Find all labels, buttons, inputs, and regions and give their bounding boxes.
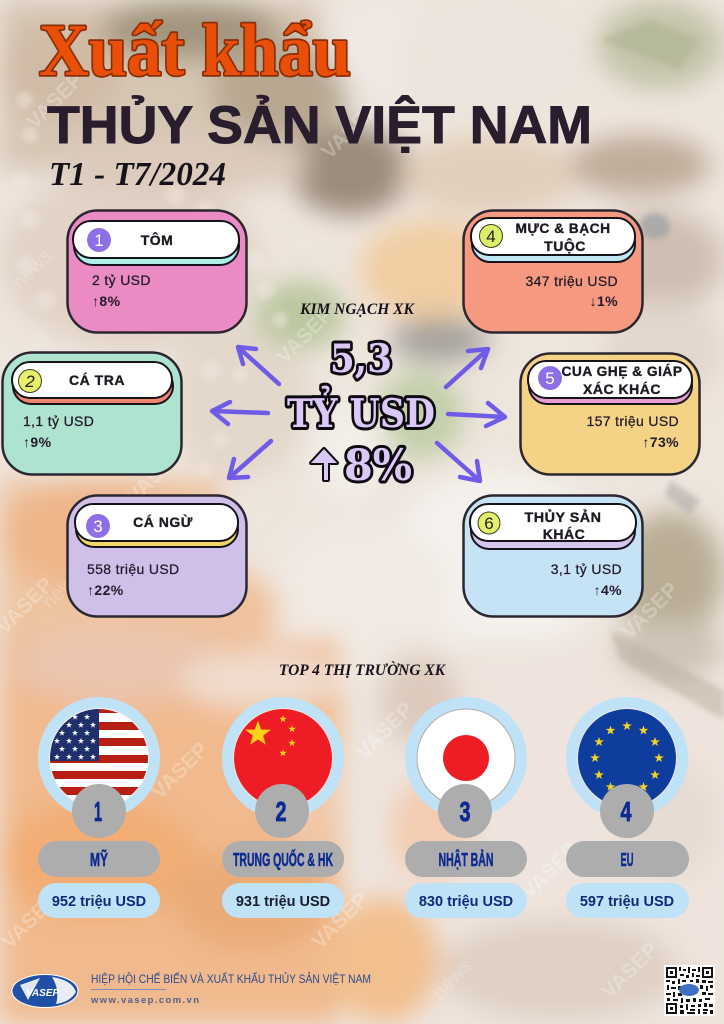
background photo collage of seafood: VASEP	[502, 548, 568, 614]
label: kim ngạch XK: KIM NGẠCH XK	[299, 301, 416, 318]
background photo collage of seafood: VASEP	[272, 303, 338, 369]
market: EU	[566, 697, 689, 918]
header: Mực & bạch tuộc: 4	[486, 227, 496, 246]
header: Thủy sản khác: 6	[484, 514, 494, 533]
total value: TỶ USD	[287, 386, 435, 437]
panel: Tôm	[68, 210, 246, 332]
header: Cá tra	[12, 362, 173, 404]
period: T1 - T7/2024: T1 - T7/2024	[49, 156, 226, 193]
header: Mực & bạch tuộc: TUỘC	[544, 237, 586, 254]
value: Cá ngừ: 558 triệu USD	[87, 561, 179, 577]
total value	[287, 336, 435, 491]
market: EU: 597 triệu USD	[580, 894, 674, 910]
heading: Thủy sản Việt Nam: THỦY SẢN VIỆT NAM	[47, 94, 592, 155]
arrow: to Tôm	[238, 347, 279, 384]
change: Cá tra: ↑9%	[23, 434, 52, 450]
background photo collage of seafood: VASEP	[352, 698, 418, 764]
header: Cá ngừ	[75, 504, 238, 547]
QR code	[664, 965, 715, 1016]
flag: China	[234, 709, 332, 807]
market: Mỹ: 952 triệu USD	[52, 894, 146, 910]
value: Cá tra: 1,1 tỷ USD	[23, 413, 94, 429]
market: Trung Quốc & HK: 931 triệu USD	[236, 894, 330, 910]
market: Trung Quốc & HK	[222, 697, 344, 918]
header: Cá tra: CÁ TRA	[69, 372, 125, 388]
arrow: to Cá ngừ	[229, 441, 271, 478]
value: Mực & bạch tuộc: 347 triệu USD	[526, 273, 618, 289]
background photo collage of seafood: VASEP	[22, 68, 88, 134]
market: EU: 4	[620, 796, 632, 827]
header: Cua ghẹ & giáp xác khác: XÁC KHÁC	[583, 381, 661, 397]
header: Thủy sản khác	[470, 504, 636, 549]
header: Cá ngừ: CÁ NGỪ	[133, 513, 193, 530]
change: Cua ghẹ & giáp xác khác: ↑73%	[642, 434, 679, 450]
change: Thủy sản khác: ↑4%	[594, 582, 622, 598]
logo: VASEP	[12, 974, 78, 1008]
value: Tôm: 2 tỷ USD	[92, 272, 151, 288]
value: Cua ghẹ & giáp xác khác: 157 triệu USD	[587, 413, 679, 429]
market: Trung Quốc & HK: TRUNG QUỐC & HK	[233, 849, 333, 870]
flag: Japan	[417, 709, 515, 807]
background photo collage of seafood: VASEP	[472, 258, 538, 324]
market: Nhật Bản: NHẬT BẢN	[438, 849, 494, 870]
flag: USA	[50, 709, 148, 800]
market: Trung Quốc & HK: 2	[276, 796, 286, 827]
total value: 5,3	[330, 336, 392, 382]
background photo collage of seafood: VASEP	[637, 408, 703, 474]
background photo collage of seafood: VASEP	[147, 738, 213, 804]
background photo collage of seafood: VASEP	[122, 443, 188, 509]
market: Nhật Bản	[405, 697, 527, 918]
heading: top 4 thị trường XK: TOP 4 THỊ TRƯỜNG XK	[279, 662, 447, 679]
footer: rule	[91, 989, 166, 990]
panel: Cá ngừ	[68, 496, 246, 616]
background photo collage of seafood: news	[428, 955, 477, 1004]
title: Xuất khẩu: Xuất khẩu	[39, 10, 351, 92]
market: Mỹ	[38, 697, 160, 918]
background photo collage of seafood: news	[543, 220, 592, 269]
arrow: to Mực & bạch tuộc	[446, 349, 488, 387]
header: Cua ghẹ & giáp xác khác: 5	[545, 369, 555, 388]
background photo collage of seafood: VASEP	[182, 228, 248, 294]
background photo collage of seafood: news	[38, 565, 87, 614]
panel: Thủy sản khác	[464, 496, 642, 616]
panel: Mực & bạch tuộc	[464, 210, 642, 332]
arrows	[212, 347, 505, 481]
header: Thủy sản khác: THỦY SẢN	[524, 508, 602, 525]
flag: EU	[578, 709, 676, 807]
footer: website: www.vasep.com.vn	[90, 995, 199, 1006]
background photo collage of seafood: news	[578, 835, 627, 884]
background photo collage of seafood: VASEP	[307, 888, 373, 954]
market: Nhật Bản: 830 triệu USD	[419, 894, 513, 910]
market: EU: EU	[620, 850, 634, 870]
background photo collage of seafood: VASEP	[617, 578, 683, 644]
market: Nhật Bản: 3	[460, 796, 470, 827]
total value: 8%	[344, 441, 412, 491]
header: Cá tra: 2	[24, 372, 35, 391]
background photo collage of seafood: VASEP	[192, 538, 258, 604]
panel: Cua ghẹ & giáp xác khác	[520, 354, 700, 474]
header: Tôm: 1	[94, 231, 104, 250]
header: Tôm: TÔM	[141, 231, 173, 248]
header: Cua ghẹ & giáp xác khác: CUA GHẸ & GIÁP	[562, 363, 682, 379]
logo: VASEP: VASEP	[26, 988, 59, 999]
header: Mực & bạch tuộc	[471, 218, 635, 262]
value: Thủy sản khác: 3,1 tỷ USD	[551, 561, 622, 577]
arrow: to Cá tra	[212, 402, 268, 424]
footer: organisation name: HIỆP HỘI CHẾ BIẾN VÀ XUẤT KHẨU THỦY SẢN VIỆT NAM	[91, 971, 371, 986]
background photo collage of seafood: VASEP	[597, 938, 663, 1004]
background photo collage of seafood: VASEP	[517, 838, 583, 904]
header: Cua ghẹ & giáp xác khác	[528, 361, 692, 404]
background photo collage of seafood: news	[8, 245, 57, 294]
header: Mực & bạch tuộc: MỰC & BẠCH	[516, 220, 610, 236]
change: Tôm: ↑8%	[92, 293, 121, 309]
change: Mực & bạch tuộc: ↓1%	[590, 293, 618, 309]
market: Mỹ: 1	[94, 796, 102, 827]
panel: Cá tra	[2, 352, 182, 474]
arrow: to Cua ghẹ	[448, 403, 505, 426]
change: Cá ngừ: ↑22%	[87, 582, 124, 598]
header: Thủy sản khác: KHÁC	[543, 526, 585, 542]
market: Mỹ: MỸ	[90, 849, 108, 870]
arrow: to Thủy sản khác	[437, 443, 480, 481]
background photo collage of seafood: VASEP	[317, 98, 383, 164]
header: Tôm	[73, 221, 239, 265]
header: Cá ngừ: 3	[93, 517, 103, 536]
